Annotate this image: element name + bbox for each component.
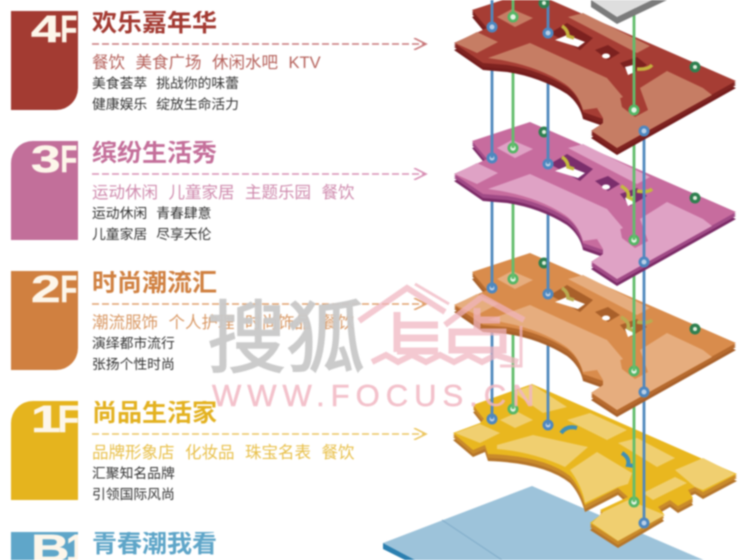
slogan: 2F line 1: 演绎都市流行 [92,336,175,351]
3F lifts [486,126,700,246]
slogan: 1F line 1: 汇聚知名品牌 [92,466,175,481]
categories: 4F: 餐饮 美食广场 休闲水吧 KTV [92,54,321,72]
arrow: 3F [91,167,428,181]
slogan: 2F line 2: 张扬个性时尚 [92,357,175,372]
2F floor plate [454,253,736,417]
slogan: 3F line 2: 儿童家居 尽享天伦 [92,227,211,242]
B1 floor plate [383,486,750,560]
categories: 3F: 运动休闲 儿童家居 主题乐园 餐饮 [92,184,354,202]
roof tile above 4F [591,0,667,24]
panel: 1F floor info [10,400,428,502]
slogan: 4F line 1: 美食荟萃 挑战你的味蕾 [92,76,239,91]
lift marker on 4F edge [638,126,650,136]
1F floor plate [453,384,737,548]
categories: 1F: 品牌形象店 化妆品 珠宝名表 餐饮 [92,444,354,462]
lift shafts 1F to 2F [492,279,650,528]
slogan: 3F line 1: 运动休闲 青春肆意 [92,206,211,221]
tag: 2F [11,271,78,370]
1F lifts [486,404,640,508]
3F floor plate [454,122,736,286]
tag: 4F [11,11,78,110]
panel: B1 floor info [10,531,217,560]
watermark: house logo [359,284,524,366]
arrow: 1F [91,427,428,441]
panel: 4F floor info [10,10,428,112]
arrow: 2F [91,297,428,311]
2F lifts [486,258,700,376]
tag: B1 [11,532,78,560]
watermark: url: WWW.FOCUS.CN [212,378,541,413]
escalators [562,157,652,192]
lift shafts 2F to 3F [492,148,650,398]
panel: 3F floor info [10,140,428,242]
escalators [561,427,634,466]
watermark: sohu characters: 搜狐 [207,274,365,389]
4F lifts [486,0,700,116]
escalators [562,26,652,69]
arrow: 4F [91,37,428,51]
tag: 1F [11,401,78,500]
4F floor plate [454,0,736,155]
categories: 2F: 潮流服饰 个人护理 时尚饰品 餐饮 [92,314,354,332]
slogan: 1F line 2: 引领国际风尚 [92,487,175,502]
lift shafts 3F to 4F [492,17,650,268]
tag: 3F [11,141,78,240]
panel: 2F floor info [10,270,428,372]
slogan: 4F line 2: 健康娱乐 绽放生命活力 [92,97,239,112]
escalators [562,288,652,323]
